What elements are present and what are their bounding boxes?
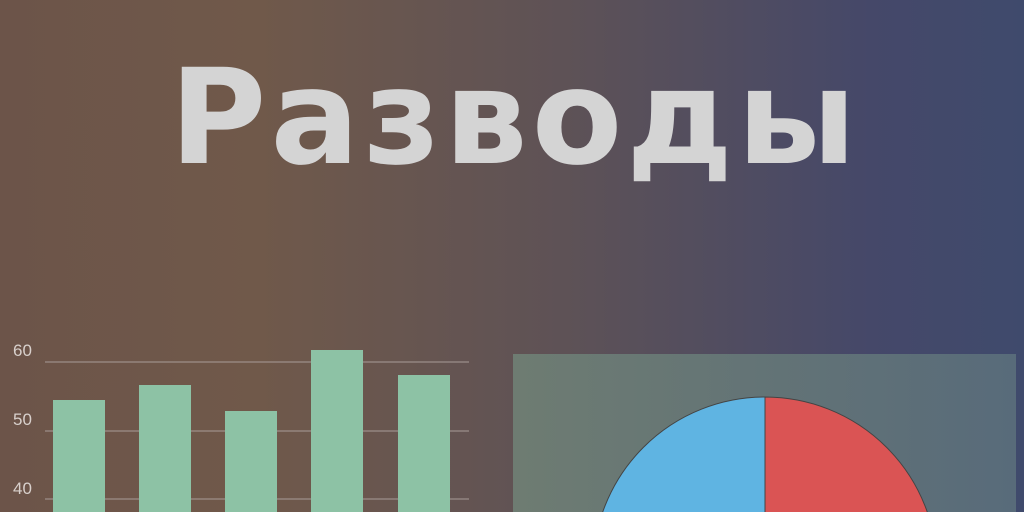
bar chart <box>13 341 469 512</box>
panel: pie chart <box>513 354 1016 512</box>
bar chart: 50 <box>13 410 32 429</box>
bar chart: 40 <box>13 479 32 498</box>
title: Разводы <box>170 41 860 195</box>
bar chart: 60 <box>13 341 32 360</box>
